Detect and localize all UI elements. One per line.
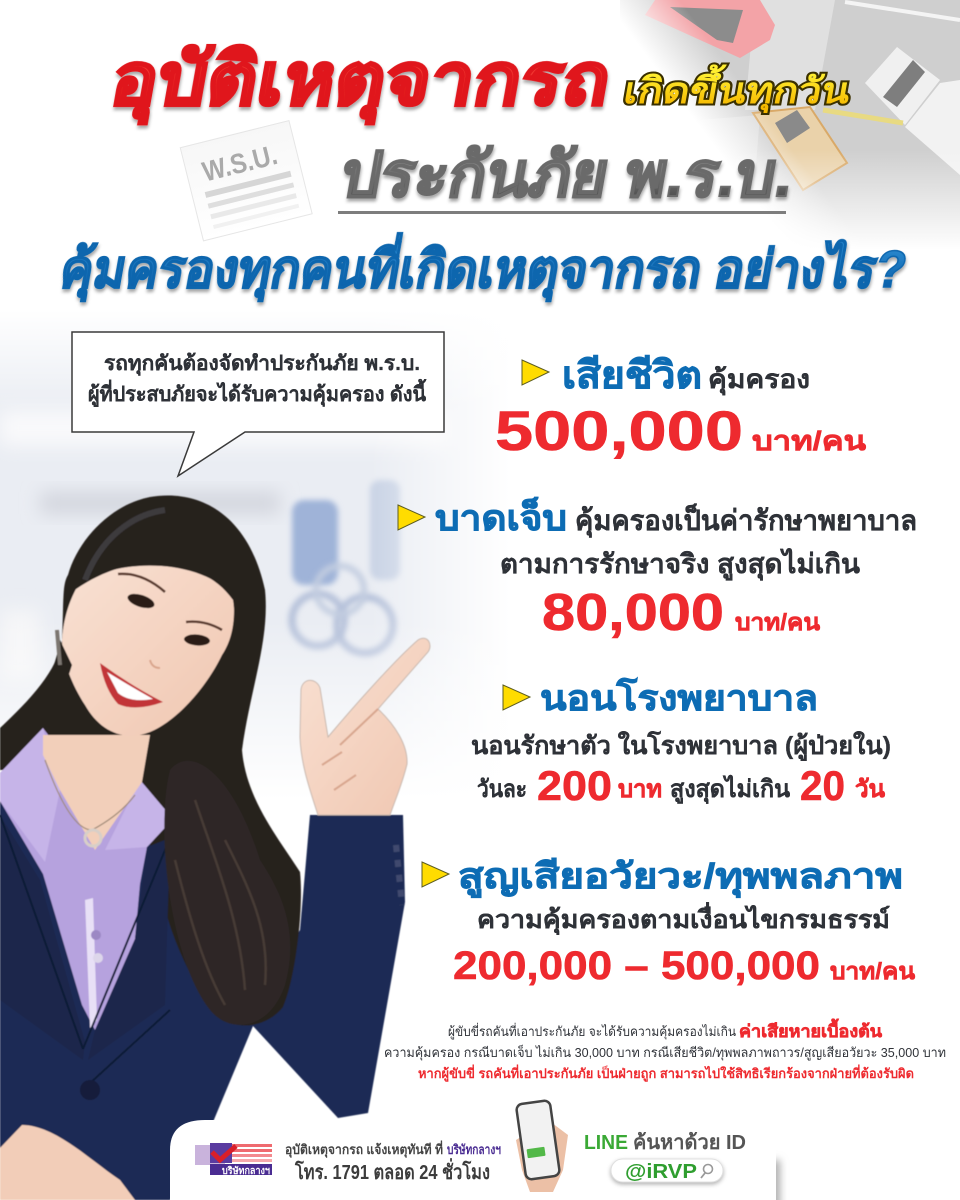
item 3: hospital stay: 200 — [537, 762, 612, 809]
item 1: death coverage — [495, 355, 867, 462]
sleeve buttons — [396, 845, 402, 905]
item 3: hospital stay: วันละ — [477, 776, 527, 803]
item 3: hospital stay: นอนรักษาตัว ในโรงพยาบาล (ผู้ป่วยใน) — [471, 730, 891, 762]
item 3: hospital stay — [471, 677, 891, 809]
item 4: loss of organ or disability: ความคุ้มครองตามเงื่อนไขกรมธรรม์ — [477, 902, 890, 936]
hair shine — [85, 510, 165, 580]
lapel seam — [0, 815, 170, 1085]
item 2: injury coverage — [398, 496, 917, 642]
fine print: ค่าเสียหายเบื้องต้น — [739, 1018, 882, 1041]
face — [62, 566, 234, 736]
icon: insurance document — [180, 121, 312, 241]
footer panel: โทร. 1791 ตลอด 24 ชั่วโมง — [294, 1157, 490, 1184]
icon: phone in hand — [516, 1100, 568, 1192]
callout: speech bubble: รถทุกคันต้องจัดทำประกันภัย พ.ร.บ. — [104, 352, 420, 376]
item 4: loss of organ or disability: 200,000 – 500,000 — [453, 944, 820, 988]
curled hair front — [164, 761, 290, 1025]
item 4: loss of organ or disability: สูญเสียอวัยวะ/ทุพพลภาพ — [458, 857, 903, 898]
item 3: hospital stay: วัน — [855, 776, 886, 803]
shirt — [0, 728, 173, 1030]
hair strands — [175, 800, 266, 1005]
suit body — [0, 800, 405, 1200]
shirt collar highlight — [0, 728, 173, 862]
icon: arrow — [522, 360, 549, 385]
search pill: @iRVP — [625, 1161, 697, 1183]
heading: blue question: คุ้มครองทุกคนที่เกิดเหตุจากรถ อย่างไร? — [55, 232, 913, 302]
shirt placket — [85, 898, 97, 1028]
neck — [43, 735, 150, 850]
left hair strand — [0, 640, 72, 762]
item 3: hospital stay: 20 — [800, 762, 845, 809]
shirt buttons — [91, 930, 101, 940]
fine print — [384, 1018, 946, 1082]
item 1: death coverage: คุ้มครอง — [708, 364, 810, 396]
item 2: injury coverage: บาท/คน — [735, 609, 820, 635]
fine print: หากผู้ขับขี่ รถคันที่เอาประกันภัย เป็นฝ่ายถูก สามารถไปใช้สิทธิเรียกร้องจากฝ่ายที่ต้องรับผิด — [418, 1064, 914, 1082]
footer panel: ค้นหาด้วย ID — [633, 1131, 746, 1154]
item 2: injury coverage: ตามการรักษาจริง สูงสุดไม่เกิน — [500, 548, 861, 581]
background: crash scene — [620, 0, 960, 250]
hand and finger — [300, 638, 430, 815]
item 3: hospital stay: นอนโรงพยาบาล — [540, 677, 818, 718]
logo — [195, 1143, 272, 1177]
line id: LINE — [584, 1132, 628, 1154]
hair back — [0, 496, 301, 1026]
button — [80, 1080, 100, 1100]
item 3: hospital stay: สูงสุดไม่เกิน — [670, 774, 791, 805]
hair fringe — [72, 502, 257, 715]
callout: speech bubble — [72, 332, 444, 476]
earring — [57, 630, 60, 665]
curled fingers — [322, 709, 378, 790]
fine print: ความคุ้มครอง กรณีบาดเจ็บ ไม่เกิน 30,000 บาท กรณีเสียชีวิต/ทุพพลภาพถาวร/สูญเสียอวัยวะ 35,000 บาท — [384, 1043, 946, 1061]
background: blurred crowd — [0, 300, 520, 810]
report text: อุบัติเหตุจากรถ แจ้งเหตุทันที ที่ — [285, 1140, 443, 1158]
footer panel: บริษัทกลางฯ — [447, 1142, 501, 1157]
item 1: death coverage: เสียชีวิต — [562, 355, 702, 397]
item 2: injury coverage: 80,000 — [542, 584, 724, 642]
icon: arrow — [398, 505, 425, 530]
eyebrows and eyes — [118, 574, 222, 630]
nose — [150, 660, 160, 668]
item 4: loss of organ or disability — [422, 857, 915, 988]
title: main red heading: อุบัติเหตุจากรถ — [104, 39, 617, 125]
mouth — [100, 663, 163, 708]
woman presenter — [0, 496, 430, 1200]
heading underline — [338, 211, 786, 214]
item 1: death coverage: 500,000 — [495, 399, 743, 462]
heading: compulsory insurance: ประกันภัย พ.ร.บ. — [336, 140, 800, 210]
lower hand — [0, 1125, 135, 1200]
fine print: ผู้ขับขี่รถคันที่เอาประกันภัย จะได้รับความคุ้มครองไม่เกิน — [448, 1023, 736, 1040]
item 2: injury coverage: บาดเจ็บ — [435, 496, 567, 538]
footer panel — [170, 1100, 780, 1200]
callout: speech bubble: ผู้ที่ประสบภัยจะได้รับความคุ้มครอง ดังนี้ — [88, 378, 427, 408]
necklace — [45, 760, 135, 830]
item 2: injury coverage: คุ้มครองเป็นค่ารักษาพยาบาล — [575, 503, 917, 538]
title: yellow subheading: เกิดขึ้นทุกวัน — [620, 64, 855, 114]
logo: บริษัทกลางฯ — [222, 1165, 270, 1177]
item 3: hospital stay: บาท — [618, 776, 662, 803]
icon: arrow — [422, 862, 449, 887]
item 4: loss of organ or disability: บาท/คน — [830, 958, 915, 984]
item 1: death coverage: บาท/คน — [752, 426, 867, 456]
icon: insurance document: W.S.U. — [199, 139, 280, 187]
icon: arrow — [503, 685, 530, 710]
search pill — [611, 1159, 723, 1183]
suit lapels — [0, 815, 170, 1060]
